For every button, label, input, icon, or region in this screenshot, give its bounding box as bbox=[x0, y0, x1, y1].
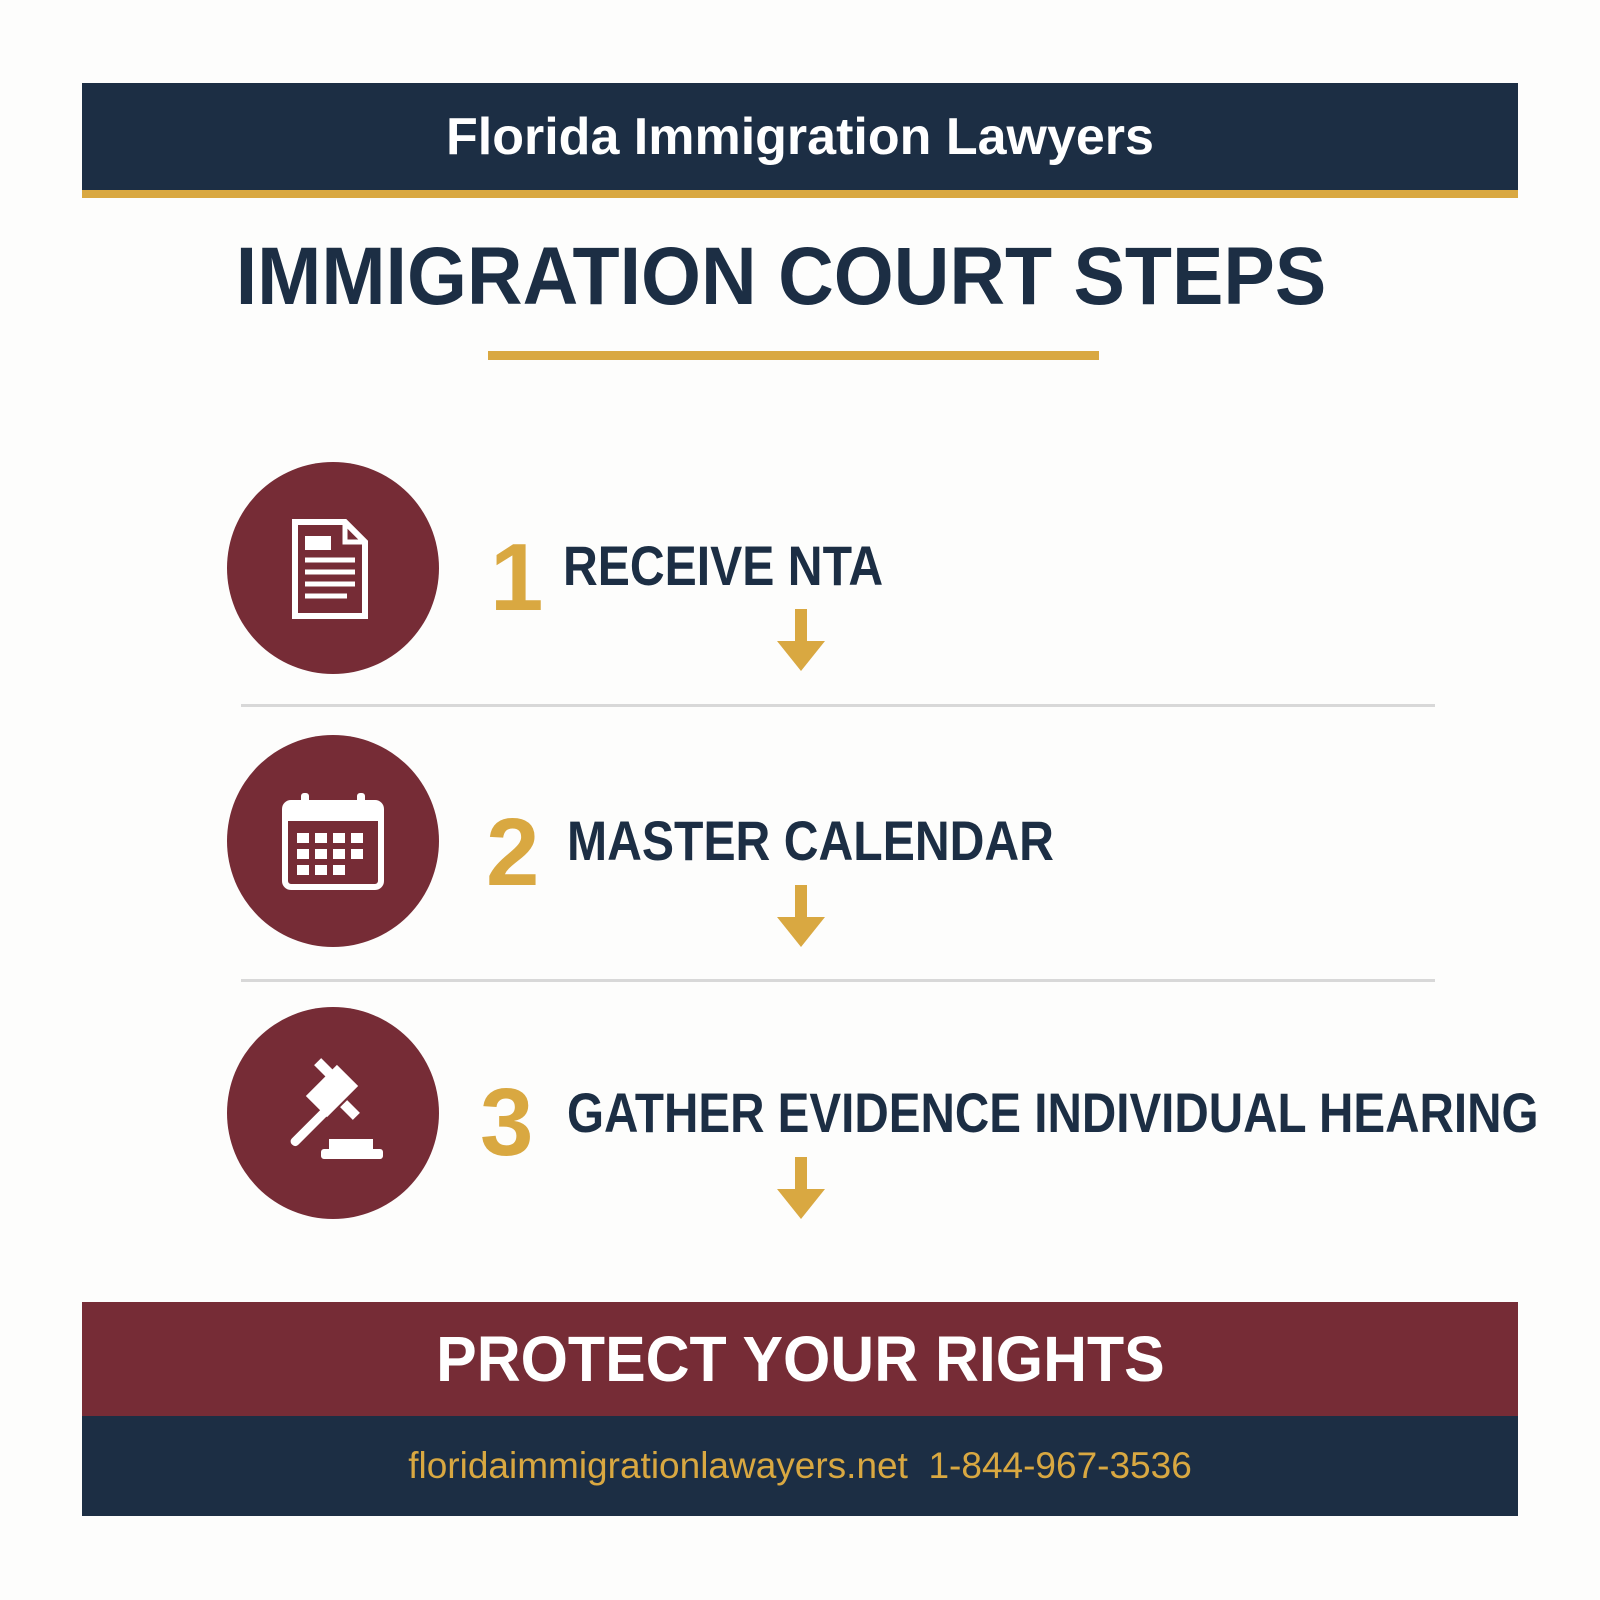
arrow bbox=[777, 609, 825, 671]
footer contact: floridaimmigrationlawayers.net 1-844-967-3536 bbox=[408, 1445, 1192, 1486]
banner: protect your rights: PROTECT YOUR RIGHTS bbox=[436, 1323, 1164, 1395]
label: master calendar: MASTER CALENDAR bbox=[567, 809, 1054, 872]
footer contact bbox=[82, 1416, 1518, 1516]
title: IMMIGRATION COURT STEPS bbox=[236, 231, 1326, 322]
arrow bbox=[777, 885, 825, 947]
icon: calendar bbox=[227, 735, 439, 947]
step 2 bbox=[227, 735, 1054, 947]
title underline bbox=[488, 351, 1099, 360]
number 3: 3 bbox=[480, 1069, 533, 1176]
number 2: 2 bbox=[486, 799, 539, 906]
step 3 bbox=[227, 1007, 1538, 1219]
label: receive NTA: RECEIVE NTA bbox=[563, 534, 883, 597]
header gold stripe bbox=[82, 190, 1518, 198]
header bar bbox=[82, 83, 1518, 191]
banner: protect your rights bbox=[82, 1302, 1518, 1416]
icon: document bbox=[227, 462, 439, 674]
header bar: Florida Immigration Lawyers bbox=[446, 108, 1154, 166]
step 1 bbox=[227, 462, 883, 674]
arrow bbox=[777, 1157, 825, 1219]
icon: gavel bbox=[227, 1007, 439, 1219]
number 1: 1 bbox=[490, 524, 543, 631]
label: gather evidence individual hearing: GATHER EVIDENCE INDIVIDUAL HEARING bbox=[567, 1081, 1538, 1144]
